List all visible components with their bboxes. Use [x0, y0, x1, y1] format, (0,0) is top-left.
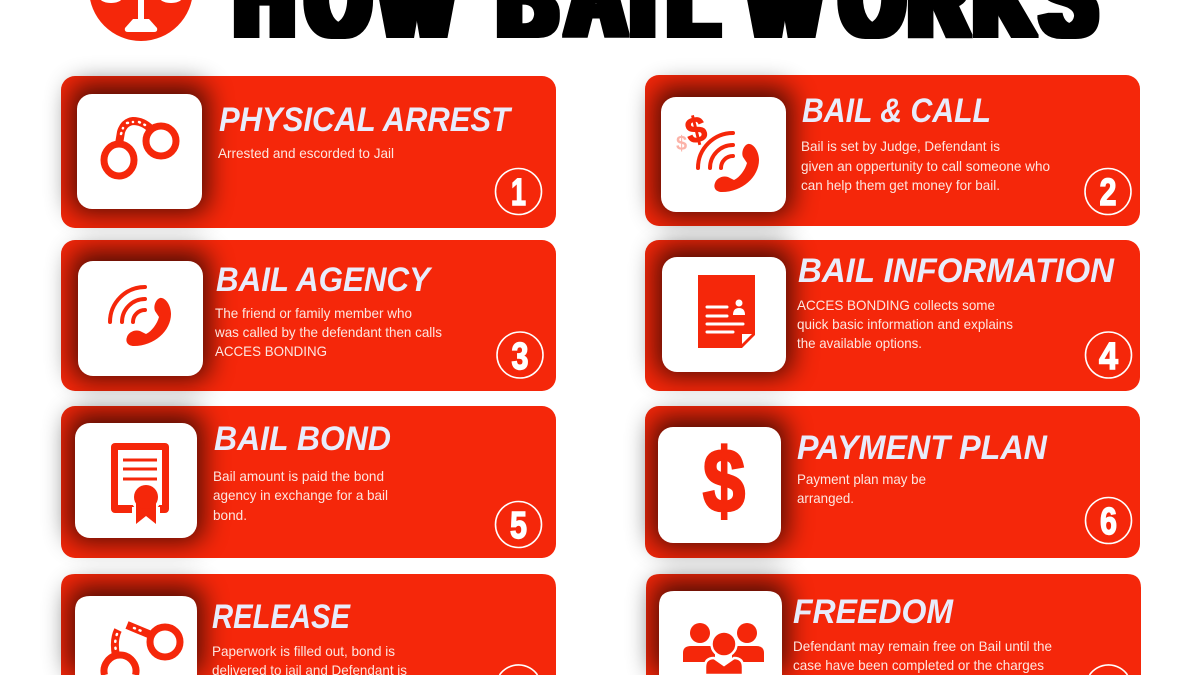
- description: arranged.: [797, 490, 854, 506]
- step number 1: [496, 168, 542, 214]
- heading: RELEASE: [212, 598, 351, 636]
- heading: PHYSICAL ARREST: [219, 101, 513, 139]
- panel: step 6 payment plan: [645, 406, 1140, 558]
- description: case have been completed or the charges: [793, 657, 1044, 673]
- icon: broken handcuffs: [75, 596, 197, 675]
- panel: step 8 freedom: [646, 574, 1141, 675]
- heading: BAIL & CALL: [802, 92, 991, 130]
- icon: phone with dollar signs: [661, 97, 786, 212]
- icon: scales of justice emblem: [89, 0, 193, 41]
- heading: FREEDOM: [793, 593, 954, 631]
- description: given an oppertunity to call someone who: [801, 158, 1050, 174]
- step number 2: [1085, 168, 1131, 214]
- description: was called by the defendant then calls: [214, 324, 442, 340]
- description: [797, 297, 1013, 351]
- step number 7: [500, 665, 538, 675]
- description: agency in exchange for a bail: [213, 487, 388, 503]
- step number 5: 5: [510, 505, 527, 547]
- heading: BAIL AGENCY: [216, 261, 433, 299]
- description: bond.: [213, 507, 247, 523]
- step number 6: [1086, 498, 1132, 544]
- icon: document with person: [662, 257, 786, 372]
- icon: dollar sign: [658, 427, 781, 543]
- heading: BAIL INFORMATION: [798, 252, 1115, 290]
- description: Arrested and escorded to Jail: [218, 145, 394, 161]
- step number 5: [496, 502, 542, 548]
- description: Payment plan may be: [797, 471, 926, 487]
- description: [213, 468, 388, 523]
- description: quick basic information and explains: [797, 316, 1013, 332]
- description: [801, 138, 1050, 193]
- description: Defendant may remain free on Bail until the: [793, 638, 1052, 654]
- heading: BAIL BOND: [214, 420, 391, 458]
- description: can help them get money for bail.: [801, 177, 1000, 193]
- step number 6: 6: [1100, 501, 1117, 543]
- panel: step 3 bail agency: [61, 240, 556, 391]
- panel: step 5 bail bond: [61, 406, 556, 558]
- heading: PAYMENT PLAN: [797, 429, 1048, 467]
- description: [793, 638, 1052, 673]
- step number 2: 2: [1100, 172, 1116, 214]
- description: ACCES BONDING collects some: [797, 297, 995, 313]
- description: the available options.: [797, 335, 922, 351]
- icon: phone with dollar signs: $: [681, 107, 711, 152]
- icon: handcuffs: [77, 94, 202, 209]
- description: [797, 471, 926, 506]
- step number 4: 4: [1099, 336, 1118, 378]
- icon: dollar sign: $: [703, 432, 745, 532]
- icon: phone with dollar signs: $: [676, 133, 687, 155]
- description: ACCES BONDING: [215, 343, 327, 359]
- panel: step 2 bail and call: [645, 75, 1140, 226]
- step number 8: [1090, 665, 1128, 675]
- description: The friend or family member who: [215, 305, 412, 321]
- description: [214, 305, 442, 359]
- panel: step 7 release: [61, 574, 556, 675]
- panel: step 1 physical arrest: [61, 76, 556, 228]
- step number 1: 1: [511, 172, 526, 214]
- step number 4: [1086, 332, 1132, 378]
- icon: ringing phone: [78, 261, 203, 376]
- icon: certificate with seal: [75, 423, 197, 538]
- panel: step 4 bail information: [645, 240, 1140, 391]
- step number 3: [497, 332, 543, 378]
- description: Bail amount is paid the bond: [213, 468, 384, 484]
- icon: group of people: [659, 591, 782, 675]
- description: Paperwork is filled out, bond is: [212, 643, 395, 659]
- description: Bail is set by Judge, Defendant is: [801, 138, 1000, 154]
- step number 3: 3: [512, 336, 528, 378]
- description: [212, 643, 407, 675]
